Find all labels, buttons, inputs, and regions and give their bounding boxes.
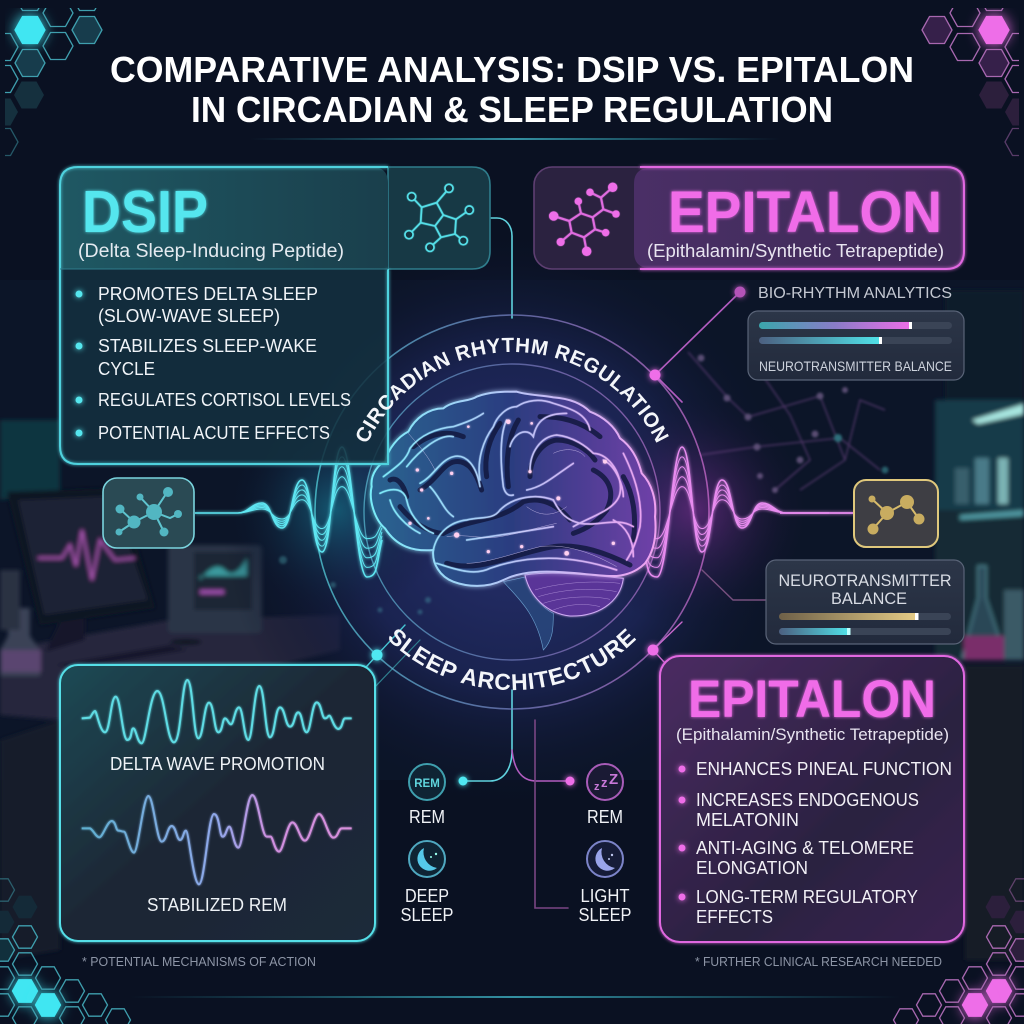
chart: delta wave (82, 680, 352, 743)
hexagon cluster: top left (0, 0, 102, 156)
ring label: sleep architecture: SLEEP ARCHITECTURE (389, 628, 636, 690)
connector lines (358, 218, 766, 908)
Epitalon heading: EPITALON (668, 180, 942, 245)
icon box: left molecule (103, 478, 194, 548)
stabilized REM label: STABILIZED REM (147, 895, 287, 915)
Epitalon subtitle: (Epithalamin/Synthetic Tetrapeptide) (647, 240, 944, 261)
hexagon cluster: top right (922, 0, 1024, 156)
hexagon cluster: bottom right (894, 879, 1024, 1024)
DSIP bullet list: REGULATES CORTISOL LEVELS (98, 389, 351, 410)
lower balance heading: BALANCE (831, 590, 907, 608)
panel: Epitalon top header (534, 167, 964, 269)
title: COMPARATIVE ANALYSIS: DSIP VS. EPITALON (110, 49, 914, 90)
hexagon cluster: bottom left (0, 879, 130, 1024)
Epitalon bullet list: INCREASES ENDOGENOUS (696, 789, 919, 810)
panel: neurotransmitter balance (lower) (766, 560, 964, 644)
lower balance heading (778, 572, 952, 608)
icon: Epitalon molecule (549, 183, 620, 256)
DSIP bullet list: POTENTIAL ACUTE EFFECTS (98, 422, 330, 443)
Epitalon panel heading: EPITALON (688, 670, 936, 729)
left waveform (195, 447, 382, 577)
icon: DSIP molecule (405, 184, 473, 251)
sleep stage: REM pink: Z (609, 771, 618, 788)
sleep stage: REM pink: z (594, 781, 600, 793)
ring node dots (372, 286, 746, 786)
sleep stage: REM pink (587, 764, 623, 827)
bio-rhythm analytics label: BIO-RHYTHM ANALYTICS (758, 285, 952, 302)
panel: Epitalon details (660, 656, 964, 942)
ring label: circadian rhythm regulation: CIRCADIAN RHYTHM REGULATION (356, 338, 669, 443)
DSIP bullet list: (SLOW-WAVE SLEEP) (98, 305, 280, 326)
DSIP subtitle: (Delta Sleep-Inducing Peptide) (78, 241, 344, 262)
panel: sleep wave charts (60, 665, 375, 941)
orbit rings around brain (315, 315, 709, 709)
DSIP bullet list: PROMOTES DELTA SLEEP (98, 283, 318, 304)
Epitalon bullet list: EFFECTS (696, 906, 773, 927)
sleep stage: REM cyan: REM (409, 806, 445, 827)
DSIP bullet list: CYCLE (98, 358, 155, 379)
sleep stage: REM pink: z (601, 775, 608, 790)
Epitalon bullet list: ANTI-AGING & TELOMERE (696, 837, 914, 858)
panel: DSIP (60, 167, 490, 464)
icon box: gold molecule (854, 480, 938, 547)
DSIP bullet list: STABILIZES SLEEP-WAKE (98, 335, 317, 356)
sleep stage: light sleep: LIGHT (580, 885, 630, 906)
sleep stage: REM pink: REM (587, 806, 623, 827)
sleep stage: REM cyan: REM (414, 778, 440, 790)
Epitalon bullet list: MELATONIN (696, 809, 799, 830)
DSIP bullet list (76, 283, 351, 443)
Epitalon bullet list: LONG-TERM REGULATORY (696, 886, 918, 907)
right waveform (642, 447, 854, 577)
title: IN CIRCADIAN & SLEEP REGULATION (191, 89, 833, 130)
sleep stage: light sleep (578, 841, 632, 925)
brain gyri highlights (380, 400, 641, 572)
chart: stabilized REM wave (82, 795, 352, 884)
brain illustration (371, 392, 656, 650)
sleep stage: deep sleep: SLEEP (400, 904, 454, 925)
Epitalon bullet list (678, 758, 952, 927)
Epitalon panel subtitle: (Epithalamin/Synthetic Tetrapeptide) (676, 725, 949, 744)
title (110, 49, 914, 130)
brain sulci dark folds (390, 417, 635, 566)
footnote: left: * POTENTIAL MECHANISMS OF ACTION (82, 955, 316, 969)
DSIP heading: DSIP (82, 179, 208, 245)
sleep stage: REM cyan (409, 764, 445, 827)
Epitalon bullet list: ELONGATION (696, 857, 808, 878)
panel: neurotransmitter balance bars (upper) (748, 311, 964, 380)
footnote: right: * FURTHER CLINICAL RESEARCH NEEDED (695, 955, 942, 969)
lower balance heading: NEUROTRANSMITTER (778, 572, 952, 590)
sleep stage: light sleep: SLEEP (578, 904, 632, 925)
delta wave label: DELTA WAVE PROMOTION (110, 754, 325, 774)
sleep stage: deep sleep: DEEP (405, 885, 449, 906)
Epitalon bullet list: ENHANCES PINEAL FUNCTION (696, 758, 952, 779)
sleep stage: deep sleep (400, 841, 454, 925)
upper balance label: NEUROTRANSMITTER BALANCE (759, 358, 952, 374)
